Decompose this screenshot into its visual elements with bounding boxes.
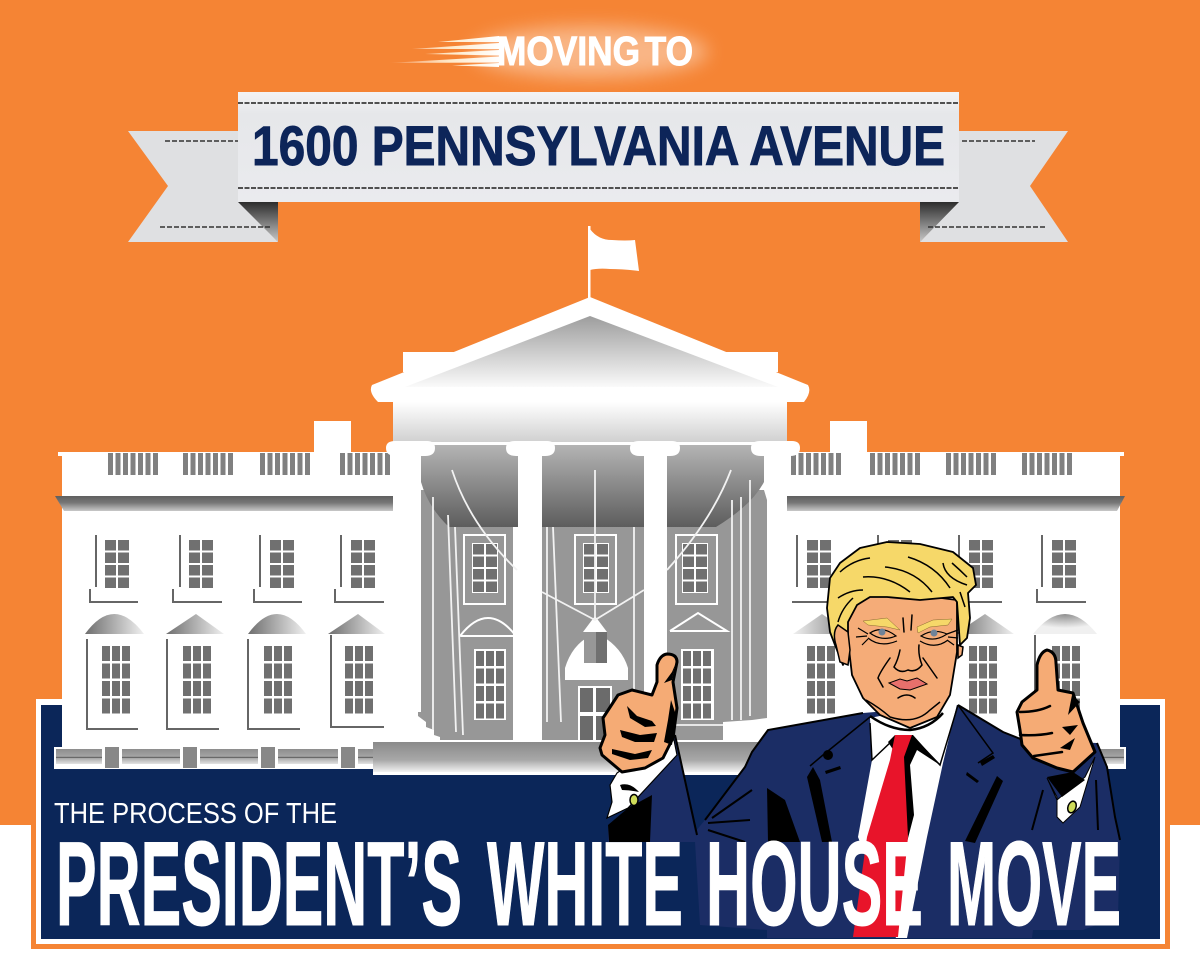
main title: PRESIDENT’S	[56, 817, 462, 951]
left cufflink	[620, 784, 639, 806]
main title: HOUSE	[706, 817, 923, 951]
logo: moving to	[388, 26, 708, 78]
mouth	[889, 678, 927, 690]
suit	[608, 705, 1120, 938]
ears	[834, 625, 963, 665]
portico roof	[371, 297, 809, 442]
logo: moving to: MOVING TO	[497, 28, 693, 74]
portico line work	[433, 470, 750, 735]
title panel frame	[31, 695, 1170, 949]
left cuff	[607, 735, 677, 818]
flag	[588, 226, 639, 298]
eyes	[856, 628, 958, 645]
main title: WHITE	[487, 817, 683, 951]
right cufflink	[1066, 800, 1078, 814]
shirt	[858, 700, 958, 938]
banner text: 1600 PENNSYLVANIA AVENUE	[252, 114, 945, 177]
hair	[827, 542, 976, 665]
donald trump cartoon	[600, 542, 1120, 938]
right hand thumb up	[1017, 650, 1095, 772]
hair strands	[838, 557, 967, 622]
left hand thumb up	[600, 654, 677, 772]
white house illustration	[54, 297, 1126, 775]
right wing	[785, 421, 1125, 748]
chin shadow	[870, 713, 943, 730]
nose and wrinkles	[878, 615, 937, 698]
ribbon banner	[128, 92, 1068, 242]
necktie	[853, 735, 940, 937]
upper portico windows	[464, 535, 717, 604]
left wing	[55, 421, 398, 748]
white lower band	[0, 825, 1200, 954]
eyebrows	[863, 618, 952, 633]
black shadow under right hand	[1047, 772, 1085, 797]
jowl line	[866, 700, 940, 720]
ground balustrades	[54, 747, 1126, 769]
face	[846, 590, 957, 728]
suit outlines and folds	[675, 705, 1120, 842]
collar	[870, 705, 958, 765]
portico columns and bays	[373, 441, 843, 775]
subtitle: THE PROCESS OF THE	[54, 798, 337, 830]
portico steps	[373, 742, 843, 775]
column capitals	[386, 441, 800, 456]
lower portico windows and door	[460, 613, 727, 741]
right cuff	[1047, 757, 1095, 823]
lapels	[807, 705, 1003, 843]
